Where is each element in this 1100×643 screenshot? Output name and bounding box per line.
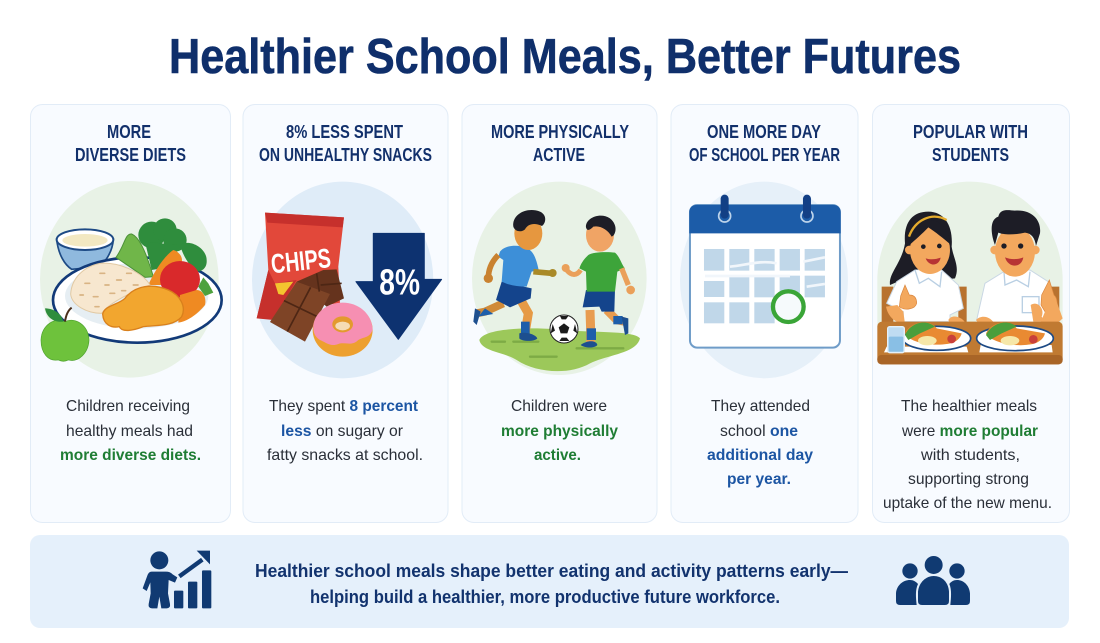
text: less spent on snacks — [267, 398, 423, 464]
heading: less spent on snacks — [259, 122, 432, 165]
text: more physically active: active. — [534, 447, 581, 464]
text: more physically active: more physically — [501, 423, 618, 440]
icon: calendar with circled day — [680, 182, 848, 378]
icon: students with thumbs up at table — [877, 182, 1063, 364]
text: popular with students: with students, — [920, 447, 1020, 464]
heading: less spent on snacks: ON UNHEALTHY SNACKS — [259, 145, 432, 165]
heading: popular with students — [913, 122, 1028, 165]
text: more diverse diets: Children receiving — [66, 398, 190, 415]
icon: unhealthy snacks with down arrow: 8% — [379, 262, 420, 303]
text: popular with students: supporting strong — [908, 471, 1029, 488]
text: conclusion message: Healthier school meals shape better eating and activity patterns early— — [255, 561, 848, 581]
title: Healthier School Meals, Better Futures — [169, 30, 961, 84]
heading: popular with students: STUDENTS — [932, 145, 1009, 165]
heading: more diverse diets: DIVERSE DIETS — [75, 145, 186, 165]
text: one more day of school: school one — [720, 423, 798, 440]
text: conclusion message — [255, 561, 848, 607]
panel: one more day of school — [671, 104, 858, 522]
panel: more physically active — [462, 104, 657, 522]
text: more physically active — [501, 398, 618, 464]
text: one more day of school: additional day — [707, 447, 813, 464]
heading: one more day of school: OF SCHOOL PER YEAR — [689, 145, 840, 165]
icon: group of three people — [896, 556, 970, 605]
heading: one more day of school — [689, 122, 840, 165]
text: less spent on snacks: They spent 8 percent — [269, 398, 419, 415]
text: popular with students: uptake of the new menu. — [883, 495, 1052, 512]
text: more diverse diets — [60, 398, 201, 464]
text: more physically active: Children were — [511, 398, 607, 415]
panel: less spent on snacks — [243, 104, 448, 522]
text: one more day of school — [707, 398, 813, 488]
icon: unhealthy snacks with down arrow — [252, 182, 442, 378]
text: popular with students: The healthier meals — [901, 398, 1037, 415]
text: more diverse diets: more diverse diets. — [60, 447, 201, 464]
icon: person with rising bar chart — [143, 551, 211, 608]
heading: more physically active: ACTIVE — [533, 145, 585, 165]
heading: popular with students: POPULAR WITH — [913, 122, 1028, 142]
icon: children playing football — [472, 182, 647, 375]
text: one more day of school: They attended — [711, 398, 810, 415]
text: less spent on snacks: fatty snacks at school. — [267, 447, 423, 464]
text: more diverse diets: healthy meals had — [66, 423, 193, 440]
text: one more day of school: per year. — [727, 471, 791, 488]
panel: conclusion banner — [30, 535, 1069, 628]
heading: more diverse diets — [75, 122, 186, 165]
text: less spent on snacks: less on sugary or — [281, 423, 404, 440]
heading: more diverse diets: MORE — [107, 122, 151, 142]
text: popular with students: were more popular — [901, 423, 1038, 440]
heading: more physically active — [491, 122, 629, 165]
heading: less spent on snacks: 8% LESS SPENT — [286, 122, 403, 142]
text: conclusion message: helping build a healthier, more productive future workforce. — [310, 587, 780, 607]
icon: unhealthy snacks with down arrow: CHIPS — [269, 242, 332, 279]
panel: more diverse diets — [30, 104, 230, 522]
icon: plate of healthy food — [40, 181, 222, 378]
text: popular with students — [883, 398, 1052, 512]
heading: more physically active: MORE PHYSICALLY — [491, 122, 629, 142]
panel: popular with students — [872, 104, 1070, 522]
heading: one more day of school: ONE MORE DAY — [707, 122, 821, 142]
